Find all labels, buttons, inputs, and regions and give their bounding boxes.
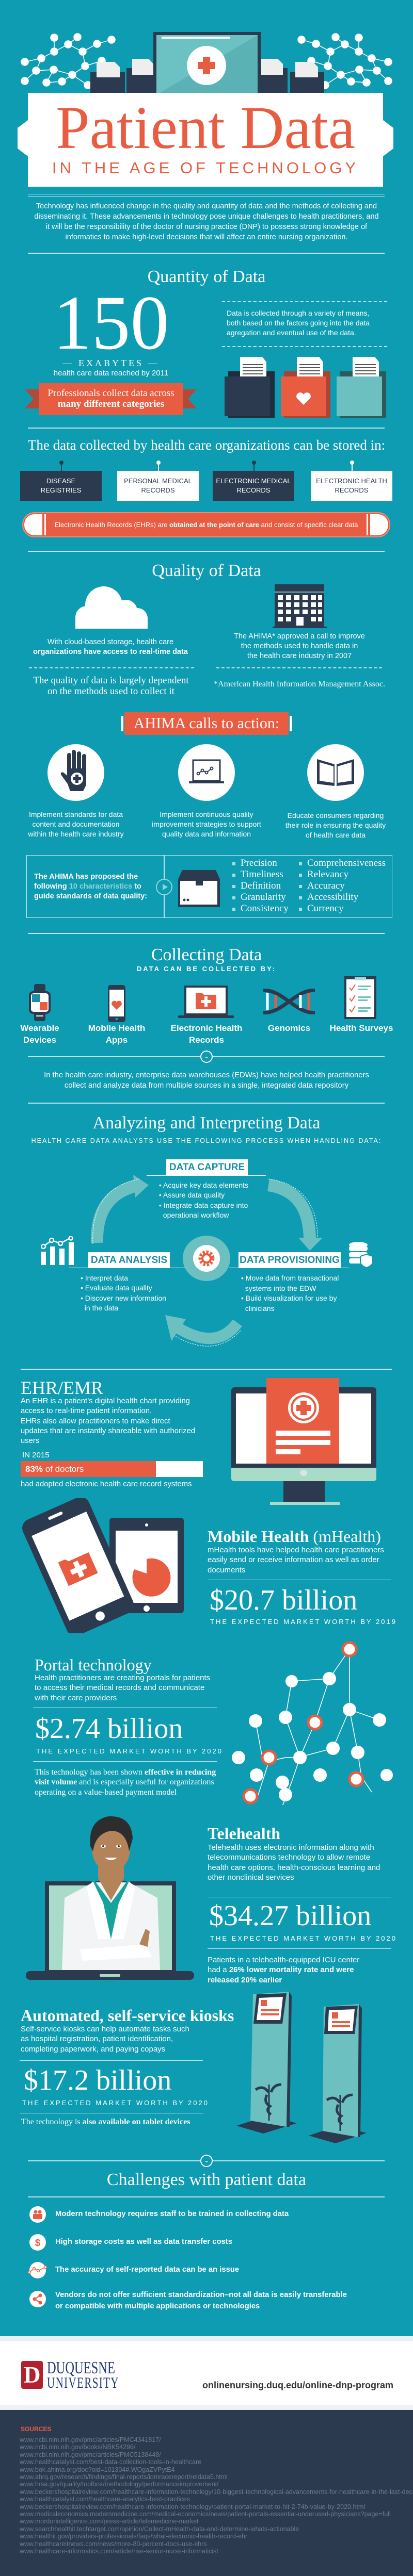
list: characteristics: Timeliness [241,869,283,880]
section: mobile health: THE EXPECTED MARKET WORTH BY 2019 [210,1618,397,1626]
icon: down chevron [200,1051,213,1063]
box: personal medical records: PERSONAL MEDICAL [124,477,192,485]
icon: book [307,744,364,801]
diagram: data process cycle: • Interpret data [81,1274,128,1282]
logo: Duquesne University: DUQUESNE [47,2358,115,2377]
text: quality dependent: on the methods used to collect it [47,686,174,697]
box: data provisioning [229,1252,349,1268]
action 2: Implement continuous quality [160,810,253,818]
action 2 [152,744,261,838]
text: proposed characteristics [34,873,147,900]
intro text: Technology has influenced change in the quality and quantity of data and the methods of collecting and [36,202,377,210]
stat: 150 exabytes: 150 [53,280,169,366]
icon: building [273,584,327,628]
challenge 3: The accuracy of self-reported data can be an issue [55,2266,239,2274]
diagram: data process cycle: systems into the EDW [245,1284,316,1292]
text: Records [189,1035,224,1045]
section: kiosks [20,2005,216,2129]
section: telehealth: Telehealth [208,1824,280,1843]
section: telehealth: health care options, health-conscious learning and [208,1863,380,1872]
text: AHIMA approved [234,632,365,660]
sources panel: www.ncbi.nlm.nih.gov/pmc/articles/PMC5138448/ [20,2451,161,2458]
arrows [91,1175,323,1347]
section: kiosks: $17.2 billion [24,2064,171,2096]
sources panel: www.healthcareitnews.com/news/more-80-percent-docs-use-ehrs [20,2540,207,2548]
footer band [0,2336,413,2410]
sources panel: www.medicaleconomics.modernmedicine.com/medical-economics/news/patient-portals-essential-underused-physicians?page=full [20,2511,391,2518]
section: telehealth [208,1823,399,1986]
diagram: data process cycle: • Acquire key data elements [159,1181,248,1189]
sources panel [0,2410,413,2576]
box: data capture [147,1159,266,1176]
section: mobile health: $20.7 billion [210,1584,357,1616]
text: proposed characteristics: guide standards of data quality: [34,892,147,900]
diagram: data process cycle: • Evaluate data quality [81,1284,152,1292]
box: electronic medical records: RECORDS [236,486,271,494]
challenge 4 [29,2291,391,2314]
heading: Analyzing and Interpreting Data: Analyzing and Interpreting Data [93,1113,320,1133]
section: EHR/EMR: users [21,1437,39,1445]
list: characteristics [232,858,289,914]
text: Electronic Health [171,1023,242,1033]
sources panel: www.ahrq.gov/research/findings/final-reports/iomracereport/reldata5.html [20,2473,228,2481]
box: electronic health records: ELECTRONIC HEALTH [316,477,387,485]
title banner [18,93,393,187]
header illustration [21,32,392,93]
sources panel: www.beckershospitalreview.com/healthcare-information-technology/patient-portal-market-to-hit-2-74b-value-by-2020.html [20,2503,365,2511]
box: personal medical records [117,461,199,501]
sources panel: www.healthit.gov/providers-professionals/faqs/what-electronic-health-record-ehr [20,2533,247,2540]
sources panel: www.healthcatalyst.com/healthcare-analytics-best-practices [20,2496,190,2503]
box: electronic medical records: ELECTRONIC MEDICAL [216,477,291,485]
panel: 10 characteristics: Currency [307,903,344,914]
section: kiosks: Self-service kiosks can help automate tasks such [21,2025,189,2033]
text: cloud storage: organizations have access to real-time data [33,648,188,656]
box: electronic health records [311,461,392,501]
text: cloud storage [33,638,188,656]
heading: Challenges: Challenges with patient data [107,2170,306,2189]
icon: down chevron 2 [200,2155,213,2167]
section: telehealth: Patients in a telehealth-equipped ICU center [208,1956,359,1964]
labels: collection methods: Devices [23,1035,56,1045]
section: kiosks: The technology is also available on tablet devices [21,2118,190,2126]
section: portal technology [33,1654,229,1796]
intro text: disseminating it. These advancements in technology pose unique challenges to health practitioners, and [34,212,379,221]
sources panel: www.hrsa.gov/quality/toolbox/methodology/performanceimprovement/ [20,2481,219,2488]
text: AHIMA approved: the health care industry in 2007 [247,652,352,660]
action 3 [285,744,386,839]
section: portal technology: $2.74 billion [35,1713,183,1745]
text: Genomics [268,1023,310,1033]
callout: EHR pill [22,512,390,537]
section: portal technology: THE EXPECTED MARKET WORTH BY 2020 [36,1747,223,1755]
sources panel: www.mordorintelligence.com/press-article/telemedicine-market [20,2518,199,2525]
text: AHIMA approved: The AHIMA* approved a call to improve [234,632,365,641]
box: data analysis: DATA ANALYSIS [91,1255,167,1266]
box: disease registries: REGISTRIES [41,486,81,494]
text: data collected means: agregation and eventual use of the data. [227,329,356,337]
action 1: within the health care industry [28,830,124,838]
sources panel: www.searchhealthit.techtarget.com/opinion/Collect-mHealth-data-and-determine-whats-actionable [20,2525,299,2533]
list: characteristics: Consistency [241,903,289,914]
logo: Duquesne University: UNIVERSITY [47,2374,119,2391]
icon: down chevron: ⌄ [204,1053,209,1060]
section: EHR/EMR: EHR/EMR [21,1377,103,1398]
labels: collection methods [20,1023,59,1045]
diagram: data process cycle: clinicians [245,1304,275,1312]
box: data analysis [69,1252,186,1268]
section: telehealth: $34.27 billion [209,1900,371,1932]
section: mobile health: documents [208,1566,245,1574]
icon: cloud [75,586,148,629]
section: portal technology: with their care providers [35,1694,117,1702]
text: proposed characteristics: The AHIMA has proposed the [34,873,138,881]
diagram: data process cycle: • Discover new information [81,1294,166,1302]
heading: Collecting Data: Collecting Data [151,945,262,964]
storage boxes [20,461,392,501]
text: Mobile Health [88,1023,145,1033]
section: telehealth: other nonclinical services [208,1873,294,1882]
icon: left network [21,34,115,89]
icon: watch [29,984,51,1021]
icon: phone [108,985,125,1022]
icon: kiosks [235,1992,369,2144]
section: kiosks: THE EXPECTED MARKET WORTH BY 2020 [22,2099,209,2107]
diagram: data process cycle: • Assure data quality [159,1191,225,1199]
sources panel: www.ncbi.nlm.nih.gov/pmc/articles/PMC4341817/ [20,2436,161,2443]
icon: right network [298,34,392,89]
logo: Duquesne University: D [23,2361,41,2388]
text: quality dependent: The quality of data is largely dependent [33,675,189,686]
text: HEALTH CARE DATA ANALYSTS USE THE FOLLOWING PROCESS WHEN HANDLING DATA: [31,1137,382,1144]
heading: AHIMA calls to action [121,712,292,735]
challenge 4: Vendors do not offer sufficient standardization–not all data is easily transferable [55,2291,347,2299]
section: telehealth: Telehealth uses electronic information along with [208,1843,374,1852]
stat: 150 exabytes: — EXABYTES — [63,358,159,368]
section: portal technology: Health practitioners are creating portals for patients [35,1673,210,1682]
text: data collected means: Data is collected through a variety of means, [227,309,369,317]
icon: arrow circle [156,879,172,895]
action 1: Implement standards for data [29,810,123,818]
section: kiosks: as hospital registration, patient identification, [21,2034,173,2043]
action 3: their role in ensuring the quality [285,821,386,829]
diagram: data process cycle: • Build visualization for use by [241,1294,337,1302]
action 1 [28,744,124,838]
challenge 1: Modern technology requires staff to be trained in collecting data [55,2210,289,2218]
sources panel: SOURCES [21,2425,51,2433]
text: data collected means: both based on the factors going into the data [227,319,370,327]
text: AHIMA footnote: *American Health Information Management Assoc. [214,680,385,688]
section: mobile health [208,1526,399,1627]
panel: 10 characteristics: Accuracy [307,880,345,891]
heading: Quantity of Data: Quantity of Data [148,267,265,286]
text: Apps [106,1035,128,1045]
section: portal technology: operating on a value-based payment model [35,1788,177,1797]
section: EHR/EMR: An EHR is a patient’s digital health chart providing [21,1397,190,1405]
section: mobile health: easily send or receive information as well as order [208,1555,379,1564]
labels: collection methods: Wearable [20,1023,59,1033]
action 2: improvement strategies to support [152,820,261,828]
section: telehealth: released 20% earlier [208,1976,282,1984]
section: EHR/EMR [21,1377,203,1488]
text: data collected means [227,309,370,337]
illustration: doctor on laptop [26,1810,196,1980]
intro text [34,202,379,241]
list: characteristics: Precision [241,858,277,868]
ribbon: many different categories [58,399,164,409]
text: EDW: In the health care industry, enterprise data warehouses (EDWs) have helped health practitioners [44,1071,369,1079]
section: mobile health: Mobile Health (mHealth) [208,1527,381,1546]
box: disease registries [20,461,102,501]
box: data provisioning: DATA PROVISIONING [240,1255,340,1266]
challenge 2 [29,2234,391,2252]
panel: 10 characteristics: Comprehensiveness [307,858,386,868]
list: characteristics: Definition [241,880,281,891]
text: EDW [44,1071,369,1090]
text: cloud storage: With cloud-based storage, health care [47,638,173,646]
subtitle: IN THE AGE OF TECHNOLOGY [52,159,359,177]
icon: three folders [225,357,386,418]
section: portal technology: This technology has been shown effective in reducing [35,1768,216,1777]
icon: network graph [230,1640,400,1805]
sources panel: www.bok.ahima.org/doc?oid=101304#.WOgaZVPytE4 [20,2466,175,2473]
list: challenges [29,2205,391,2314]
box: electronic health records: RECORDS [335,486,369,494]
challenge 3 [29,2262,391,2279]
sources panel: www.healthcare-informatics.com/article/rise-senior-nurse-informaticist [20,2548,218,2555]
icon: box [178,870,220,907]
challenge 2: High storage costs as well as data transfer costs [55,2238,232,2246]
challenge 4: or compatible with multiple applications or technologies [55,2302,260,2310]
icon: DNA [263,989,315,1014]
action 2: quality data and information [162,830,251,838]
section: portal technology: Portal technology [35,1655,152,1674]
icon: laptop chart [178,744,235,801]
text: AHIMA approved: the methods used to handle data in [241,642,358,650]
box: personal medical records: RECORDS [141,486,174,494]
sources panel: www.ncbi.nlm.nih.gov/books/NBK54296/ [20,2443,135,2451]
action 1: content and documentation [33,820,119,828]
diagram: data process cycle: in the data [85,1304,118,1312]
section: telehealth: telecommunications technology to allow remote [208,1853,370,1862]
heading: Quality of Data: Quality of Data [152,561,261,580]
section: EHR/EMR: access to real-time patient information. [21,1407,152,1415]
panel: 10 characteristics [26,855,392,918]
icon: monitor with chart [231,1378,376,1505]
icon: laptop [139,32,274,99]
text: EDW: collect and analyze data from multiple sources in a single, integrated data repository [65,1081,348,1090]
icon: phone and tablet [21,1498,191,1633]
icon: folders [90,59,324,96]
box: disease registries: DISEASE [46,477,75,485]
challenge 2: $ [35,2238,41,2249]
list: characteristics: Granularity [241,892,286,903]
diagram: data process cycle: • Move data from transactional [241,1274,339,1282]
icon: clipboard [344,976,376,1019]
section: kiosks: completing paperwork, and paying copays [21,2045,165,2054]
bar: 83% of doctors: 83% of doctors [25,1464,84,1474]
intro text: informatics to make high-level decisions that will affect an entire nursing organization. [65,233,348,241]
ribbon: Professionals collect data across [47,388,174,399]
diagram: data process cycle [41,1159,373,1347]
section: EHR/EMR: updates that are instantly shareable with authorized [21,1427,195,1435]
icon: down chevron 2: ⌄ [204,2157,209,2164]
section: portal technology: to access their medical records and communicate [35,1683,204,1692]
section: EHR/EMR: EHRs also allow practitioners to make direct [21,1417,170,1425]
challenge 1 [29,2205,391,2223]
section: EHR/EMR: had adopted electronic health care record systems [21,1480,192,1488]
section: kiosks: Automated, self-service kiosks [21,2006,234,2025]
icon: database [349,1242,373,1267]
text: url: onlinenursing.duq.edu/online-dnp-program [202,2380,393,2390]
text: DATA CAN BE COLLECTED BY: [137,965,276,973]
panel: 10 characteristics: Relevancy [307,869,348,880]
icon: hand [47,744,104,801]
section: telehealth: THE EXPECTED MARKET WORTH BY 2020 [210,1934,397,1942]
callout: EHR pill: Electronic Health Records (EHRs) are obtained at the point of care and consist of specific clear data [54,521,358,529]
action 3: Educate consumers regarding [288,811,384,819]
section: telehealth: had a 26% lower mortality rate and were [208,1965,354,1974]
section: mobile health: mHealth tools have helped health care practitioners [208,1546,384,1554]
diagram: data process cycle: • Integrate data capture into [159,1201,248,1209]
diagram: data process cycle: operational workflow [163,1211,229,1219]
icon: bar chart [41,1236,74,1265]
section: EHR/EMR: IN 2015 [22,1451,50,1459]
section: portal technology: visit volume and is especially useful for organizations [35,1778,214,1786]
sources panel: www.healthcatalyst.com/best-data-collection-tools-in-healthcare [20,2458,201,2466]
text: Health Surveys [330,1023,393,1033]
heading: AHIMA calls to action: AHIMA calls to action: [134,715,279,732]
title: Patient Data [56,94,355,161]
text: proposed characteristics: following 10 characteristics to [34,882,141,891]
panel: 10 characteristics: Accessibility [307,892,358,903]
stat: 150 exabytes: health care data reached by 2011 [54,369,168,378]
ribbon [25,383,197,415]
box: data capture: DATA CAPTURE [169,1162,245,1173]
text: quality dependent [33,675,189,697]
box: electronic medical records [213,461,294,501]
logo: Duquesne University [21,2361,138,2390]
icon: gear [183,1236,230,1281]
text: of health care data [306,831,366,839]
icon: laptop folder [178,986,234,1018]
intro text: it will be the responsibility of the doctor of nursing practice (DNP) to possess strong knowledge of [46,223,367,231]
heading: stored in: The data collected by health care organizations can be stored in: [28,437,385,453]
bar: 83% of doctors [21,1461,203,1477]
